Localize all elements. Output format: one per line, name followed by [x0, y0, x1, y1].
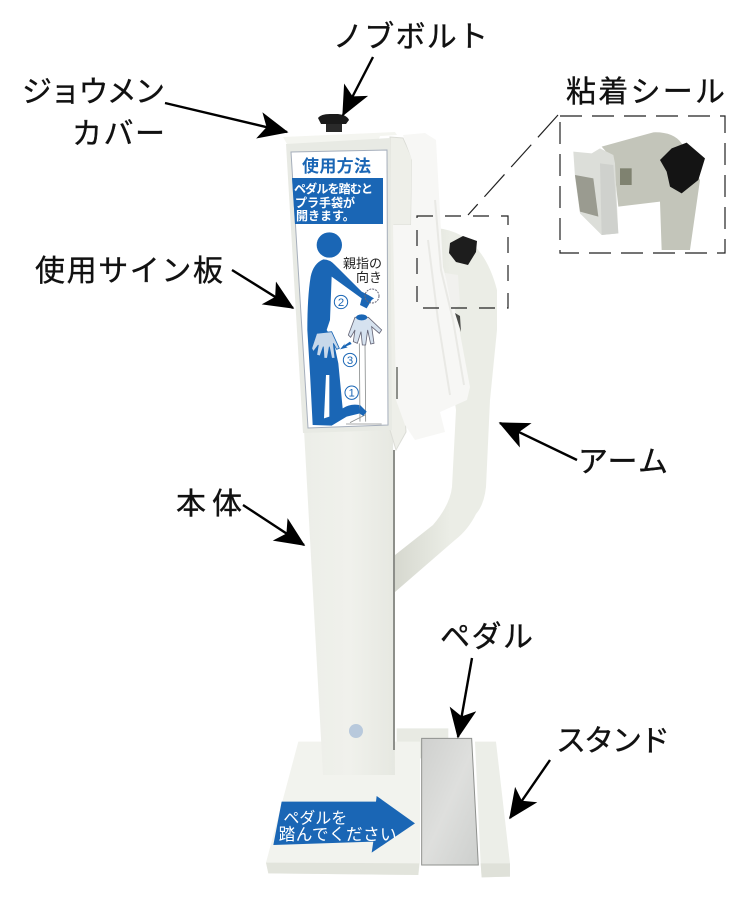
back bracket [397, 728, 448, 758]
sign blue band: プラ手袋が [295, 195, 355, 210]
arrow [232, 270, 293, 308]
sign heading: 使用方法 [302, 156, 371, 176]
pictogram group [307, 232, 382, 426]
pictogram: small arrow to glove [340, 342, 352, 349]
thumb direction note: 向き [356, 270, 382, 285]
base plate [266, 728, 448, 875]
arrow [458, 658, 472, 737]
inset bracket [602, 132, 700, 250]
thumb direction note: 親指の [343, 256, 382, 271]
sign blue band [292, 178, 383, 224]
label: body [176, 488, 304, 545]
pictogram: worn glove hand [312, 332, 339, 358]
sign blue band: ペダルを踏むと [294, 181, 373, 196]
usage sign [286, 138, 392, 433]
step numbers [334, 295, 358, 400]
pictogram: stand and pedal lines [346, 343, 382, 424]
arrow [500, 423, 577, 460]
label: jomen cover: ジョウメン [22, 76, 165, 109]
label: jomen cover: カバー [72, 118, 165, 151]
step numbers: 2 [338, 297, 344, 309]
label: stand [510, 725, 670, 818]
arrow [165, 103, 287, 132]
blue arrow sign: ペダルを [283, 809, 347, 827]
right rail [475, 742, 510, 877]
dark gap behind pack [455, 313, 461, 332]
glove pack [393, 133, 470, 440]
inset photo: adhesive seal [560, 116, 725, 253]
label: knob bolt: ノブボルト [333, 21, 488, 54]
main column [304, 430, 395, 775]
blue arrow sign: 踏んでください [279, 825, 397, 844]
knob bolt [318, 114, 349, 132]
label: arm [500, 423, 668, 479]
plate front edge [266, 863, 419, 875]
label: usage sign plate: 使用サイン板 [35, 255, 223, 288]
arrow [243, 505, 304, 545]
label: pedal: ペダル [440, 621, 533, 654]
sign blue band: 開きます。 [296, 209, 355, 223]
label: jomen cover [22, 76, 287, 151]
arrow [510, 760, 550, 818]
label: knob bolt [333, 21, 488, 115]
thumb direction note [343, 256, 382, 303]
step numbers: 1 [349, 388, 355, 400]
inset knob [660, 143, 705, 193]
label: usage sign plate [35, 255, 293, 308]
label: adhesive seal: 粘着シール [566, 76, 725, 109]
arrow [343, 57, 373, 115]
pedal assembly [273, 738, 510, 877]
label: body: 本体 [176, 488, 242, 521]
arm [395, 228, 497, 592]
pictogram: hanging glove [348, 317, 382, 345]
dashed leader line [468, 115, 558, 215]
pedal plate [422, 738, 478, 865]
top cover [283, 132, 397, 144]
step numbers: 3 [347, 355, 353, 367]
plate top [266, 742, 420, 875]
label: pedal [440, 621, 533, 737]
inset frame [560, 116, 725, 253]
blue arrow sign [273, 796, 415, 853]
inset holder [573, 148, 632, 235]
label: arm: アーム [578, 446, 668, 479]
column bolt [349, 724, 363, 738]
pictogram: glove opening [356, 314, 367, 320]
pictogram: person [307, 232, 374, 426]
dashed callout: small region [417, 216, 508, 308]
side box [390, 137, 412, 450]
knob on arm [449, 236, 477, 265]
label: stand: スタンド [556, 725, 670, 758]
